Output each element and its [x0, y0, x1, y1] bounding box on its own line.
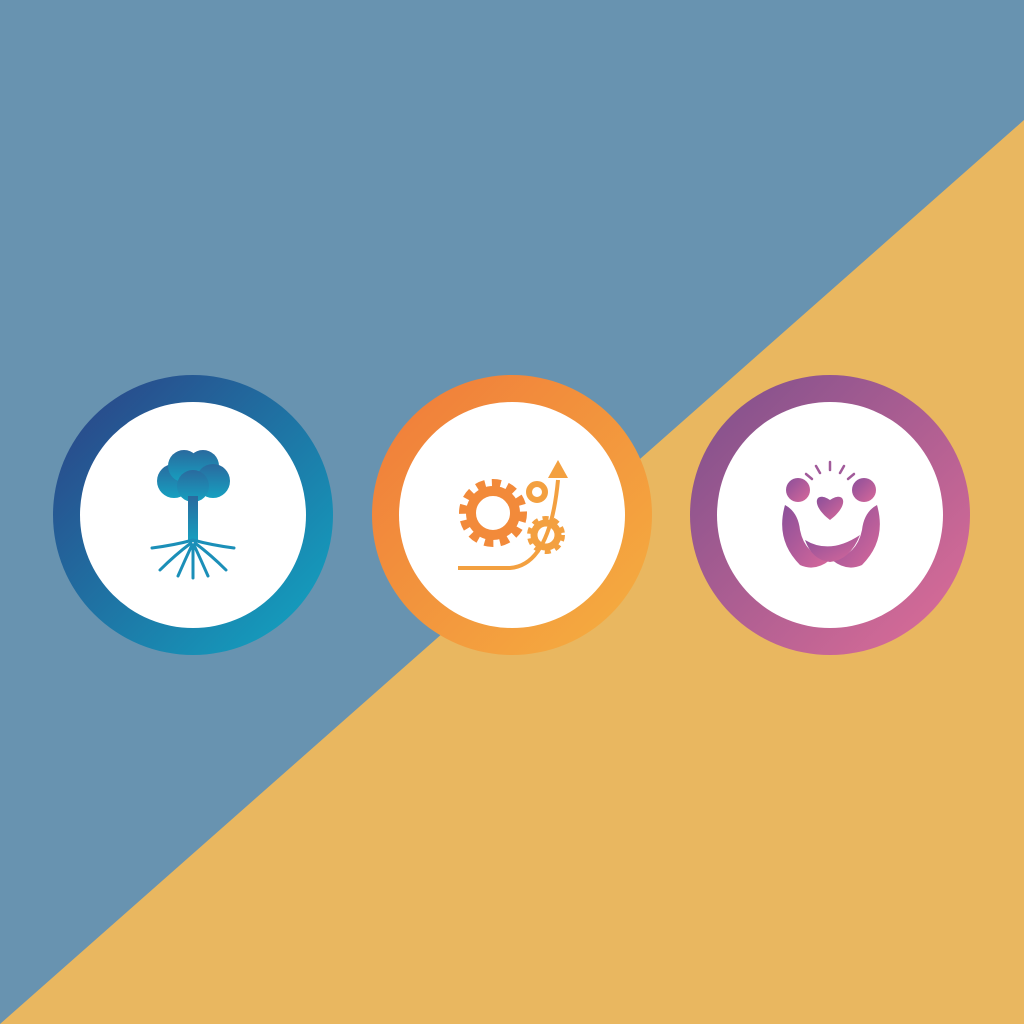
icon: gears	[458, 460, 568, 568]
circle 3: people with heart	[690, 375, 970, 655]
icon: embracing people	[782, 462, 880, 568]
circle 2: gears with growth arrow	[372, 375, 652, 655]
icon: tree	[152, 450, 234, 578]
circle 1: tree with roots	[53, 375, 333, 655]
